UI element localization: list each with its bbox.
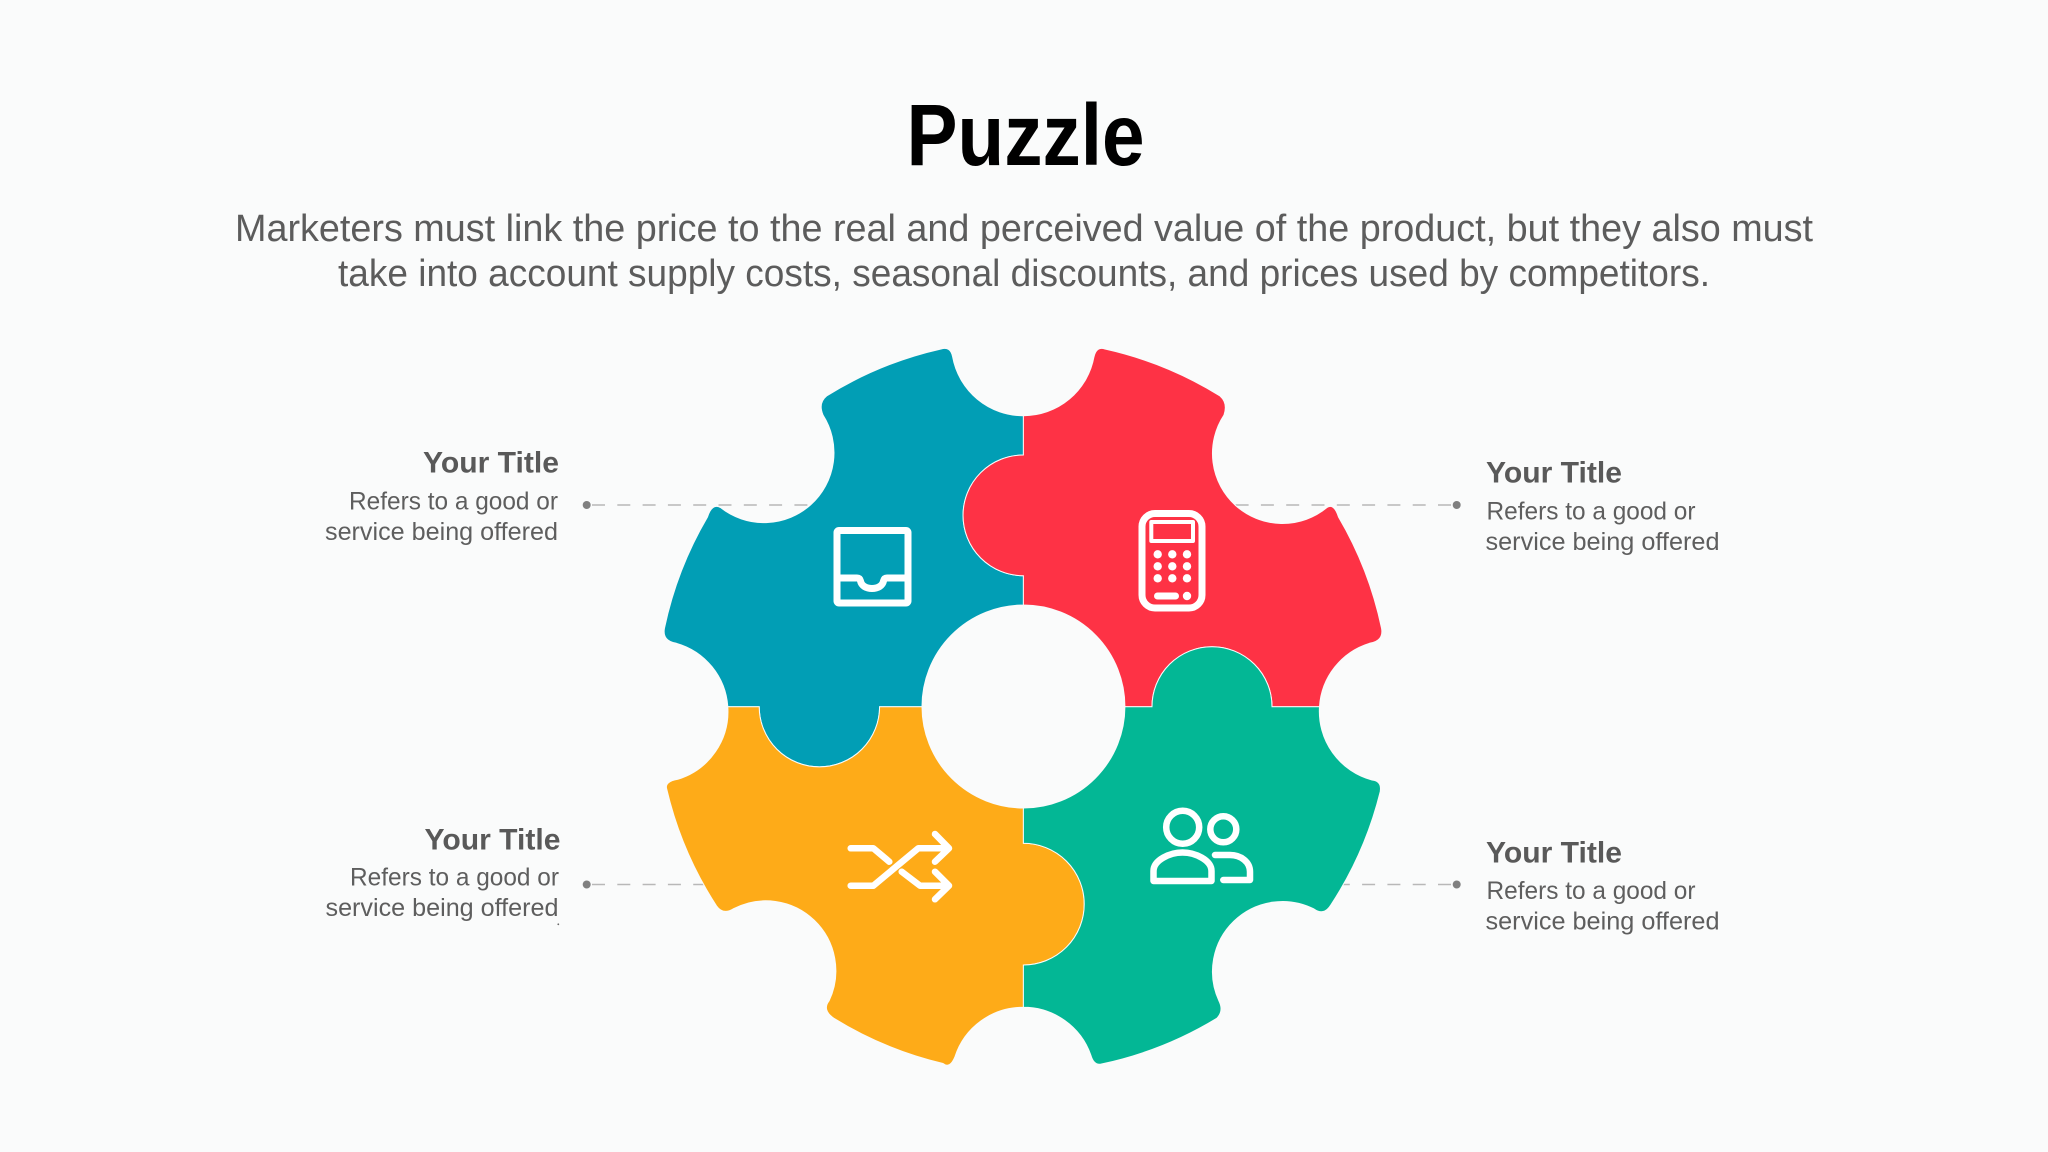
subtitle text: take into account supply costs, seasonal discounts, and prices used by competitors. [338, 253, 1710, 295]
label: top left [325, 447, 559, 546]
icon: shuffle arrows [851, 834, 949, 899]
label: top left: service being offered [325, 518, 558, 546]
label: bottom left [326, 823, 560, 925]
label: top right: service being offered [1486, 528, 1720, 556]
subtitle text: Marketers must link the price to the real and perceived value of the product, but they also must [235, 208, 1813, 250]
label: bottom left: Refers to a good or [350, 864, 559, 892]
label: bottom right: Refers to a good or [1486, 877, 1696, 905]
label: top left: Your Title [423, 447, 559, 480]
puzzle piece: green [1023, 647, 1380, 1064]
puzzle piece: red [963, 348, 1382, 707]
connector: bottom left [583, 880, 720, 888]
label: top right: Your Title [1486, 457, 1622, 490]
icon: two people [1154, 811, 1250, 881]
label: bottom right: service being offered [1486, 907, 1720, 935]
title: Puzzle [906, 87, 1144, 184]
puzzle piece: yellow [666, 707, 1084, 1065]
connector: top right [1230, 501, 1461, 509]
label: top right: Refers to a good or [1486, 497, 1696, 525]
connector: bottom right [1330, 880, 1461, 888]
label: top left: Refers to a good or [349, 487, 558, 515]
label: bottom right: Your Title [1486, 836, 1622, 869]
icon: calculator [1142, 514, 1202, 608]
label: top right [1486, 457, 1720, 556]
subtitle text [235, 208, 1813, 295]
label: bottom left: Your Title [424, 823, 560, 856]
label: bottom left: service being offered [326, 894, 558, 922]
puzzle piece: blue [664, 348, 1023, 767]
icon: inbox tray [837, 530, 908, 603]
puzzle wheel [664, 348, 1382, 1065]
connector: top left [583, 501, 830, 509]
label: bottom right [1486, 836, 1720, 935]
